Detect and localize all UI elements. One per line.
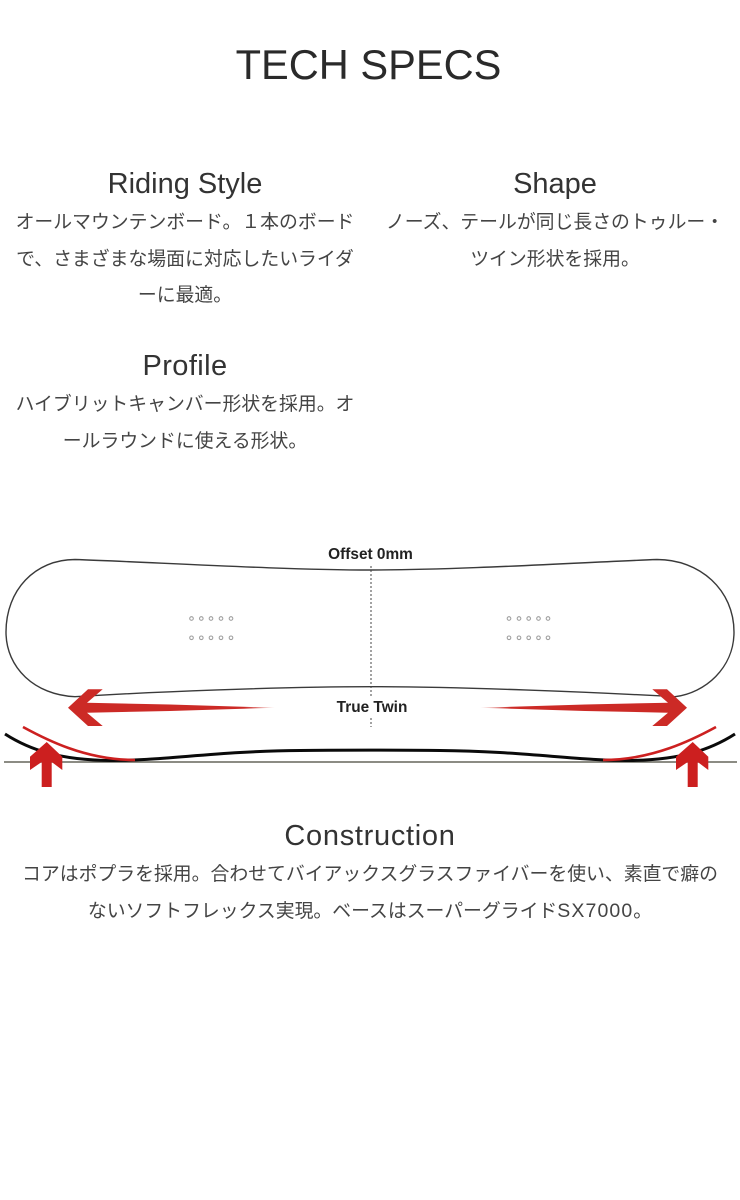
center dashed line (370, 566, 372, 727)
text block: Construction description: コアはポプラを採用。合わせてバイアックスグラスファイバーを使い、素直で癖の (22, 863, 718, 884)
binding holes right (507, 617, 550, 640)
board outline (6, 560, 734, 697)
heading: Profile: Profile (142, 350, 228, 382)
title: TECH SPECS (236, 41, 501, 88)
text block: Riding Style description (16, 211, 354, 305)
text block: Shape description: ノーズ、テールが同じ長さのトゥルー・ (386, 211, 724, 232)
profile curve (5, 734, 735, 761)
text block: Construction description: ないソフトフレックス実現。ベースはスーパーグライドSX7000。 (88, 900, 652, 922)
text block: Profile description (16, 393, 354, 450)
label: Offset 0mm: Offset 0mm (328, 546, 413, 563)
up arrow left (30, 742, 62, 787)
label: True Twin: True Twin (337, 699, 407, 716)
heading: Riding Style: Riding Style (108, 168, 262, 200)
arrow: right (480, 689, 687, 726)
text block: Riding Style description: ーに最適。 (138, 284, 232, 305)
red rocker tip right (603, 727, 716, 760)
text block: Shape description: ツイン形状を採用。 (470, 248, 640, 268)
text block: Riding Style description: で、さまざまな場面に対応したいライダ (16, 248, 354, 268)
heading: Shape: Shape (513, 168, 597, 200)
text block: Profile description: ールラウンドに使える形状。 (63, 430, 307, 450)
red rocker tip left (23, 727, 135, 760)
text block: Shape description (386, 211, 724, 268)
text block: Profile description: ハイブリットキャンバー形状を採用。オ (16, 393, 354, 414)
up arrow right (676, 742, 708, 787)
heading: Construction: Construction (284, 820, 456, 852)
binding holes left (190, 617, 233, 640)
ground line (4, 761, 737, 763)
text block: Riding Style description: オールマウンテンボード。１本のボード (16, 211, 354, 232)
arrow: left (68, 689, 275, 726)
text block: Construction description (22, 863, 718, 922)
